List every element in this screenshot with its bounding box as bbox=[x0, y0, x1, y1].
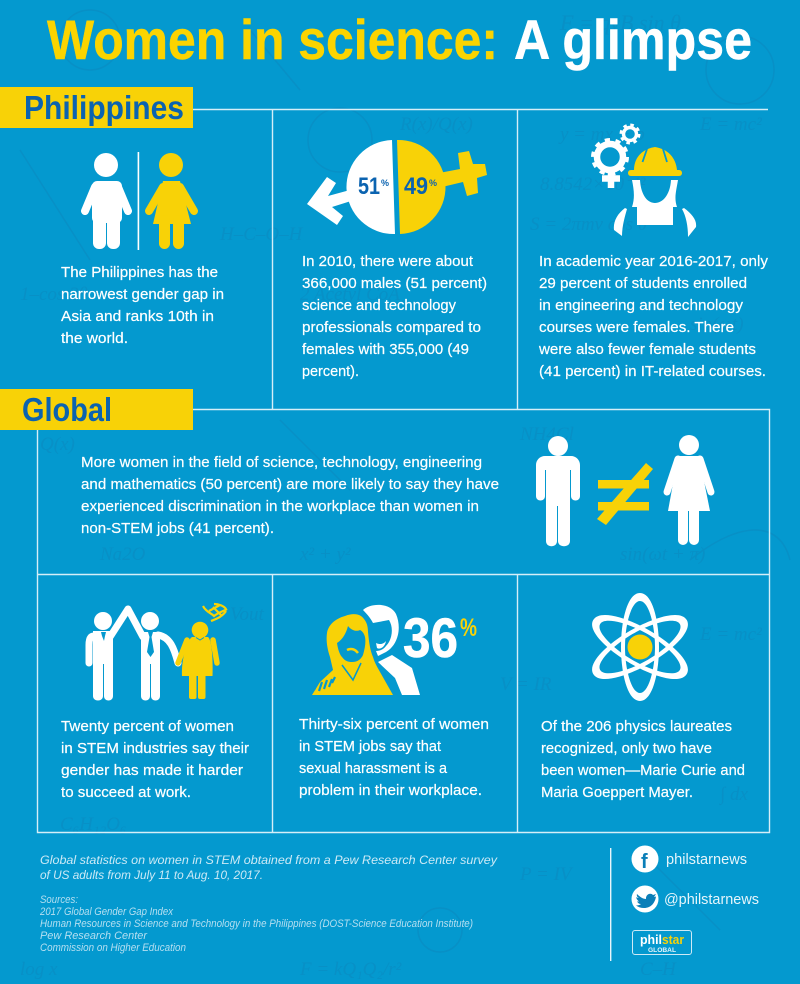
text: H–C–O–H bbox=[219, 224, 304, 245]
text: P = IV bbox=[519, 864, 574, 885]
text: discrimination: More women in the field of science, technology, engineering bbox=[81, 455, 482, 471]
icon: gender symbols pie chart: 49 bbox=[404, 173, 428, 200]
text: y = mx + b bbox=[558, 124, 645, 145]
text: harassment bbox=[299, 717, 489, 799]
text: Q(x) bbox=[40, 434, 75, 455]
text: discrimination: experienced discrimination in the workplace than women in bbox=[81, 499, 479, 515]
text: gender gap: narrowest gender gap in bbox=[61, 287, 224, 303]
text: E = mc² bbox=[699, 114, 762, 135]
text: harder to succeed: Twenty percent of women bbox=[61, 719, 234, 735]
text: engineering: In academic year 2016-2017, only bbox=[539, 254, 769, 270]
text: x² + y² bbox=[299, 544, 351, 565]
text: laureates: Maria Goeppert Mayer. bbox=[541, 785, 693, 801]
text: professionals: females with 355,000 (49 bbox=[302, 342, 469, 358]
icon: female engineer with gears bbox=[594, 125, 696, 237]
title: Women in science: bbox=[47, 8, 498, 71]
text: laureates: been women—Marie Curie and bbox=[541, 763, 745, 779]
facebook handle: f bbox=[641, 851, 648, 873]
sources list bbox=[39, 894, 473, 954]
panel: physics laureates bbox=[541, 593, 745, 801]
text: harassment: problem in their workplace. bbox=[299, 783, 482, 799]
twitter handle bbox=[632, 886, 759, 912]
text: NH4Cl bbox=[519, 424, 574, 445]
text: engineering: were also fewer female students bbox=[538, 342, 756, 358]
text: professionals: science and technology bbox=[302, 298, 457, 314]
text: log x bbox=[20, 959, 58, 980]
icon: harassment 36 percent: 36 bbox=[403, 606, 458, 669]
text: harder to succeed: gender has made it harder bbox=[61, 763, 243, 779]
icon: gender symbols pie chart: % bbox=[381, 178, 389, 188]
text: gender gap: the world. bbox=[61, 331, 128, 347]
text: F = qvB sin θ bbox=[559, 10, 681, 35]
panel: gender gap bbox=[61, 152, 224, 347]
heading: Philippines: Philippines bbox=[24, 90, 184, 127]
text: E = mc² bbox=[699, 624, 762, 645]
sources list: 2017 Global Gender Gap Index bbox=[39, 906, 174, 918]
text: harassment: Thirty-six percent of women bbox=[299, 717, 489, 733]
sources list: Sources: bbox=[40, 894, 78, 906]
text: R(x)/Q(x) bbox=[399, 114, 473, 135]
text: C–H bbox=[640, 959, 677, 980]
icon: man not equal woman bbox=[536, 435, 711, 546]
facebook handle bbox=[632, 846, 747, 873]
footnote: survey note: of US adults from July 11 to Aug. 10, 2017. bbox=[40, 868, 263, 882]
sources list: Pew Research Center bbox=[40, 930, 147, 942]
text: discrimination bbox=[81, 455, 499, 537]
text: engineering: (41 percent) in IT-related courses. bbox=[539, 364, 766, 380]
panel: sexual harassment bbox=[299, 605, 489, 799]
text: engineering bbox=[538, 254, 769, 380]
grid lines frame bbox=[38, 110, 770, 832]
text: S = 2πmv cos θ bbox=[530, 214, 647, 235]
text: harder to succeed: in STEM industries say their bbox=[61, 741, 249, 757]
logo: philstar global: GLOBAL bbox=[648, 947, 676, 954]
logo: philstar global: phil bbox=[640, 933, 662, 947]
text: engineering: courses were females. There bbox=[539, 320, 734, 336]
footnote: survey note: Global statistics on women in STEM obtained from a Pew Research Center survey bbox=[40, 853, 498, 867]
text: 2 Acetyl CoA bbox=[300, 284, 400, 305]
panel: engineering students bbox=[538, 125, 769, 380]
footnote: survey note bbox=[40, 853, 498, 882]
text: engineering: in engineering and technology bbox=[539, 298, 744, 314]
text: harder to succeed: to succeed at work. bbox=[61, 785, 191, 801]
text: sin(ωt + π) bbox=[620, 544, 705, 565]
text: professionals: In 2010, there were about bbox=[302, 254, 473, 270]
text: professionals: professionals compared to bbox=[302, 320, 481, 336]
facebook handle: philstarnews bbox=[666, 852, 747, 868]
twitter handle: @philstarnews bbox=[664, 892, 759, 908]
icon: gender symbols pie chart: % bbox=[429, 178, 437, 188]
text: gender gap bbox=[61, 265, 224, 347]
sources list: Commission on Higher Education bbox=[40, 942, 186, 954]
text: engineering: 29 percent of students enrolled bbox=[539, 276, 747, 292]
text: sin(ωt) bbox=[690, 314, 744, 335]
text: Na2O bbox=[99, 544, 146, 565]
text: ∫ dx bbox=[719, 784, 748, 806]
icon: harassment 36 percent: % bbox=[460, 614, 477, 642]
logo: philstar global bbox=[632, 930, 692, 954]
text: F = kQ₁Q₂/r² bbox=[299, 959, 402, 980]
heading: Global: Global bbox=[22, 392, 112, 429]
logo: philstar global: star bbox=[662, 933, 684, 947]
text: 8.8542×10⁻¹² bbox=[540, 174, 646, 195]
heading: Global bbox=[0, 389, 193, 430]
text: 1–cos 2θ bbox=[20, 284, 88, 305]
text: gender gap: The Philippines has the bbox=[61, 265, 218, 281]
sources list: Human Resources in Science and Technology in the Philippines (DOST-Science Education Institute) bbox=[40, 918, 473, 930]
title: A glimpse bbox=[514, 8, 752, 71]
text: harder to succeed bbox=[61, 719, 249, 801]
text: harassment: in STEM jobs say that bbox=[299, 739, 441, 755]
icon: gender symbols pie chart: 51 bbox=[358, 173, 380, 200]
text: C₆H₁₂O₆ bbox=[60, 814, 127, 835]
text: Vout bbox=[230, 604, 264, 625]
text: gender gap: Asia and ranks 10th in bbox=[61, 309, 214, 325]
panel: gender harder to succeed bbox=[61, 604, 249, 801]
text: discrimination: and mathematics (50 percent) are more likely to say they have bbox=[81, 477, 499, 493]
icon: man and woman bbox=[85, 152, 194, 250]
text: laureates: Of the 206 physics laureates bbox=[541, 719, 732, 735]
panel: workplace discrimination bbox=[81, 435, 711, 546]
text: professionals: 366,000 males (51 percent) bbox=[302, 276, 487, 292]
icon: gender symbols pie chart bbox=[307, 140, 487, 234]
icon: two men high-five beside woman bbox=[89, 604, 227, 700]
icon: harassment 36 percent bbox=[312, 605, 477, 695]
text: laureates bbox=[541, 719, 745, 801]
text: professionals bbox=[302, 254, 487, 380]
text: professionals: percent). bbox=[302, 364, 359, 380]
text: laureates: recognized, only two have bbox=[541, 741, 712, 757]
text: V = IR bbox=[500, 674, 552, 695]
text: discrimination: non-STEM jobs (41 percent). bbox=[81, 521, 274, 537]
panel: science professionals bbox=[302, 140, 487, 380]
icon: atom bbox=[584, 593, 696, 701]
text: harassment: sexual harassment is a bbox=[299, 761, 448, 777]
